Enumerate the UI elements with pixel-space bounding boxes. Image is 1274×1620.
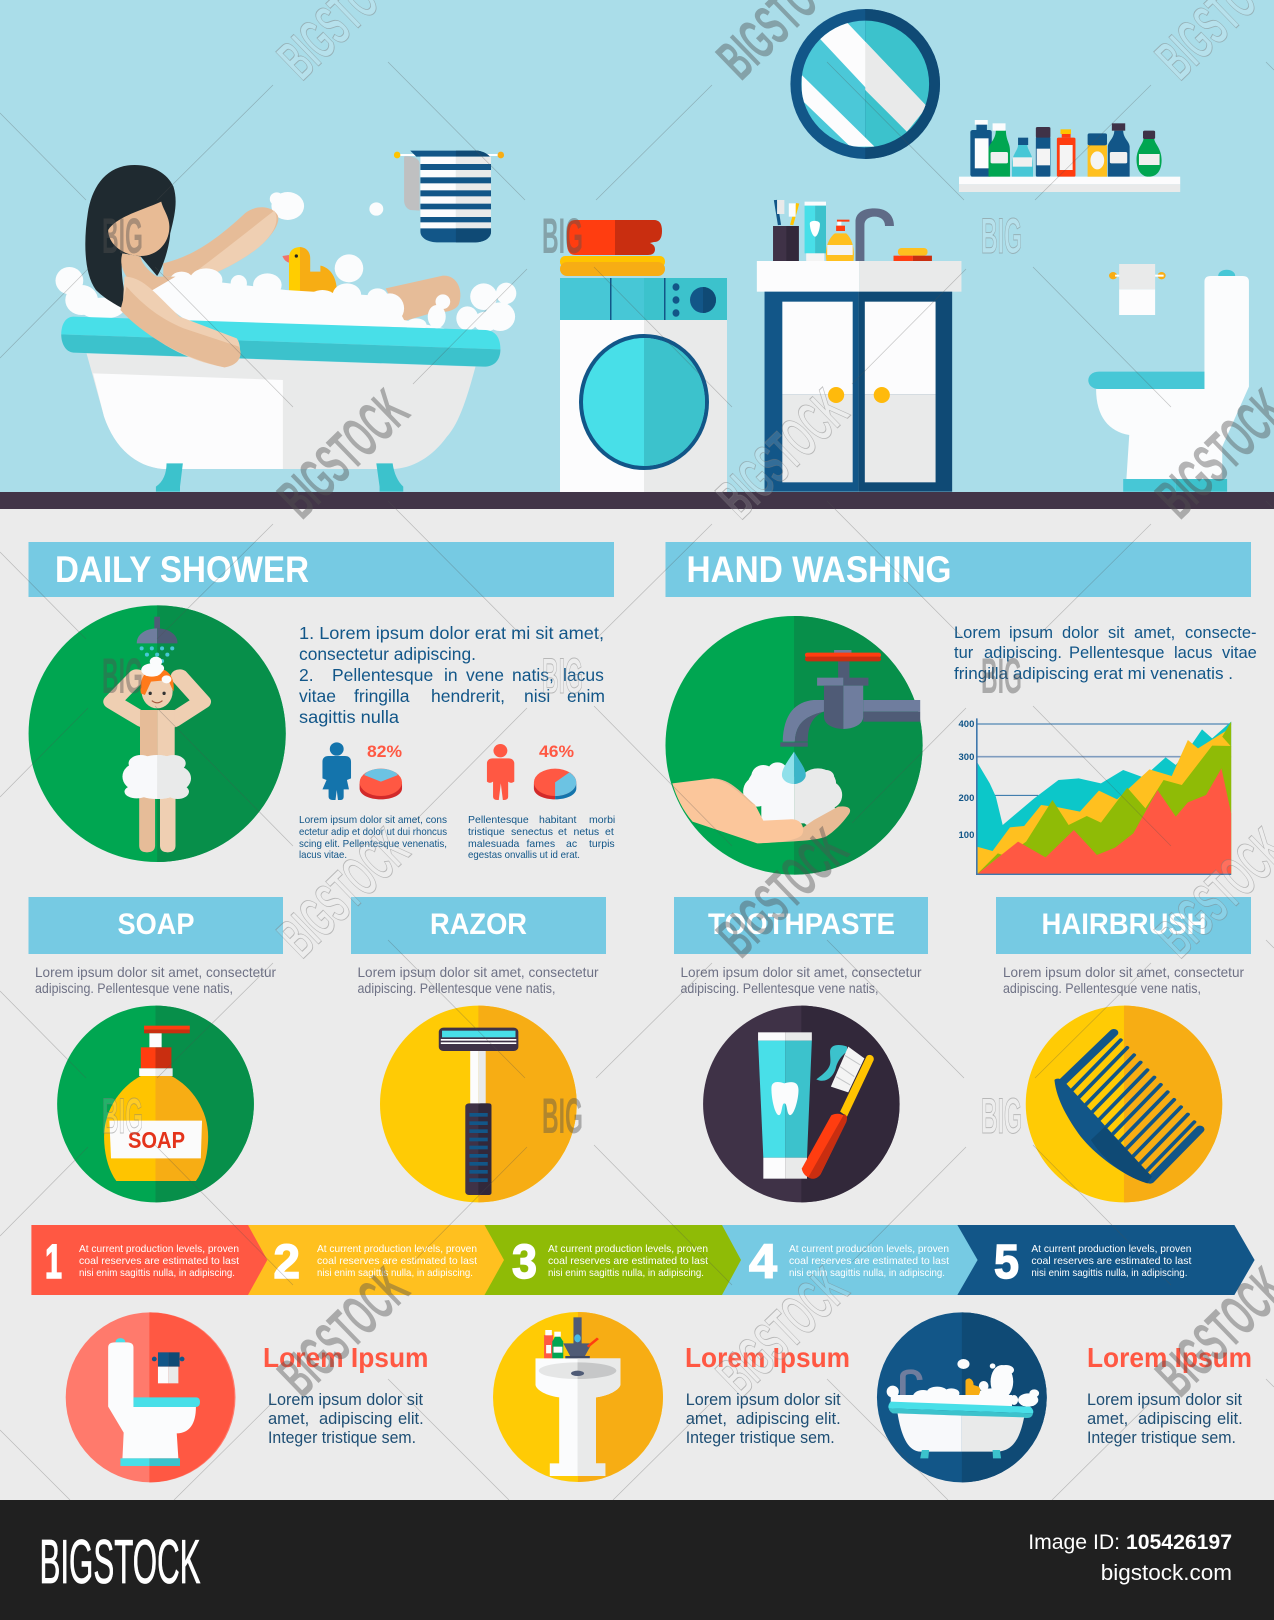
text block: hand washing copy: fringilla adipiscing erat mi venenatis . [954,665,1233,683]
watermark overlay: BIG [981,648,1022,704]
icon: soap dispenser: SOAP [128,1127,185,1153]
heading: hand washing: HAND WASHING [686,549,952,590]
icon: striped towel on rail [394,151,504,242]
text block: sink copy: elit. [815,1410,841,1428]
text block: numbered list: enim [567,686,605,706]
text block: small caption right: fames [526,838,555,850]
step 2: coal reserves are estimated to last [317,1255,477,1267]
step 2: nisi enim sagittis nulla, in adipiscing. [317,1267,473,1279]
step 2: At current production levels, proven [317,1243,477,1255]
page background [0,509,1274,1500]
text block: sink copy: adipiscing [736,1410,809,1428]
chart: layered area chart: 200 [958,793,974,804]
text block: small caption right [468,814,615,861]
text block: numbered list: 1. Lorem ipsum dolor erat mi sit amet, [299,623,604,643]
watermark overlay: BIG [981,208,1022,264]
text block: numbered list: vene [466,665,504,685]
illustration: shelf with bottles [959,120,1180,192]
text block: small caption right: morbi [589,814,615,826]
text block: soap description [35,964,276,996]
text block: numbered list: natis, [512,665,554,685]
illustration: sink cabinet with toiletries [757,200,961,492]
text block: toothpaste description [680,964,922,996]
image id: Image ID: 105426197 [1028,1531,1232,1554]
text block: hand washing copy: amet, [1134,624,1175,642]
text block: toothpaste description: adipiscing. Pellentesque vene natis, [680,980,878,996]
text block: sink copy: Integer tristique sem. [686,1429,835,1447]
text block: razor description: Lorem ipsum dolor sit amet, consectetur [358,964,599,980]
text block: sink copy: amet, [686,1410,727,1428]
text block: numbered list: 2. [299,665,314,685]
panel: five-step arrow ribbon [31,1225,1255,1295]
icon: hand under tap [665,616,923,875]
watermark overlay: BIGSTOCK [705,816,860,969]
text block: hand washing copy: sit [1108,624,1125,642]
text block: small caption left: lacus vitae. [299,849,347,861]
step 3: At current production levels, proven [548,1243,708,1255]
step 4: coal reserves are estimated to last [789,1255,949,1267]
text block: hand washing copy: adipiscing. [984,644,1062,662]
illustration: toilet and paper roll [1088,264,1249,492]
text block: small caption right: turpis [589,838,615,850]
wall background [0,0,1274,492]
text block: numbered list: Pellentesque [332,665,433,685]
text block: razor description [358,964,599,996]
text block: small caption left: Lorem ipsum dolor sit amet, cons [299,814,447,826]
text block: hand washing copy [954,624,1257,683]
watermark overlay: BIG [102,648,143,704]
step 4 [722,1225,978,1295]
step 3: coal reserves are estimated to last [548,1255,708,1267]
text block: small caption right: tristique [468,826,505,838]
text block: numbered list: in [444,665,458,685]
step 5: nisi enim sagittis nulla, in adipiscing. [1031,1267,1187,1279]
text block: bath copy: Integer tristique sem. [1087,1429,1236,1447]
panel: hand washing [665,542,1257,875]
step 1: coal reserves are estimated to last [79,1255,239,1267]
step 2: 2 [274,1236,300,1289]
text block: small caption right: et [558,826,567,838]
panel: hairbrush [996,897,1251,1202]
text block: hairbrush description: Lorem ipsum dolor sit amet, consectetur [1003,964,1244,980]
step 4: nisi enim sagittis nulla, in adipiscing. [789,1267,945,1279]
icon: person showering [29,605,286,862]
heading: toothpaste [674,897,928,954]
stat: female 82% [322,742,402,800]
icon: toilet circle [66,1312,236,1482]
text block: small caption right: netus [574,826,599,838]
text block: bath copy: amet, [1087,1410,1128,1428]
step 5: coal reserves are estimated to last [1031,1255,1191,1267]
watermark overlay: BIG [981,1088,1022,1144]
watermark overlay: BIGSTOCK [705,1255,860,1408]
step 1: nisi enim sagittis nulla, in adipiscing. [79,1267,235,1279]
text block: bath copy: elit. [1217,1410,1243,1428]
illustration: round wall mirror [790,9,940,159]
text block: small caption right: et [605,826,614,838]
text block: small caption right: senectus [511,826,553,838]
watermark overlay: BIG [542,1088,583,1144]
watermark overlay: BIG [542,208,583,264]
icon: bathtub circle [877,1312,1047,1482]
step 1: At current production levels, proven [79,1243,239,1255]
chart: layered area chart: 400 [958,719,974,730]
chart: layered area chart: 100 [958,830,974,841]
stat: female 82%: 82% [367,742,402,761]
text block: sink copy: Lorem ipsum dolor sit [686,1391,841,1409]
text block: toilet copy: Lorem Ipsum [263,1342,428,1373]
heading: soap [28,897,283,954]
text block: bath copy [1087,1342,1252,1447]
text block: toilet copy: Lorem ipsum dolor sit [268,1391,423,1409]
watermark overlay: BIGSTOCK [266,1255,421,1408]
text block: numbered list: consectetur adipiscing. [299,644,476,664]
text block: numbered list: nisi [524,686,550,706]
watermark overlay: BIG [542,648,583,704]
text block: toilet copy [263,1342,428,1447]
watermark overlay: BIG [102,208,143,264]
step 3: 3 [512,1236,537,1289]
site url: bigstock.com [1101,1560,1232,1585]
text block: hand washing copy: vitae [1222,644,1257,662]
watermark overlay: BIG [102,1088,143,1144]
text block: hand washing copy: consecte- [1185,624,1257,642]
text block: toothpaste description: Lorem ipsum dolor sit amet, consectetur [680,964,922,980]
text block: small caption right: malesuada [468,838,520,850]
text block: toilet copy: Integer tristique sem. [268,1429,416,1447]
step 4: 4 [749,1236,777,1289]
text block: small caption right: habitant [539,814,576,826]
text block: hand washing copy: Lorem [954,624,1001,642]
icon: comb [1026,1006,1222,1202]
text block: sink copy [685,1342,850,1447]
text block: numbered list: hendrerit, [431,686,505,706]
heading: hairbrush [996,897,1251,954]
step 1: 1 [45,1236,62,1289]
footer bar [0,1500,1274,1620]
text block: soap description: Lorem ipsum dolor sit amet, consectetur [35,964,276,980]
step 5: 5 [994,1236,1019,1289]
text block: razor description: adipiscing. Pellentesque vene natis, [358,980,556,996]
heading: razor: RAZOR [430,908,527,941]
heading: hand washing [666,542,1251,597]
watermark overlay: BIGSTOCK [705,377,860,530]
chart: layered area chart [958,718,1231,874]
floor strip [0,492,1274,509]
text block: numbered list [299,623,605,727]
heading: soap: SOAP [118,908,194,941]
text block: bath copy: adipiscing [1138,1410,1211,1428]
text block: numbered list: lacus [563,665,604,685]
step 2 [248,1225,504,1295]
step 5 [957,1225,1255,1295]
illustration: woman bathing in tub [56,165,516,492]
text block: small caption left: ectetur adip et dolor ut dui rhoncus [299,826,447,838]
text block: hand washing copy: ipsum [1009,624,1053,642]
panel: toothpaste [674,897,928,1202]
text block: bath copy: Lorem Ipsum [1087,1342,1252,1373]
stat: male 46%: 46% [539,742,574,761]
chart: layered area chart: 300 [958,752,974,763]
icon: razor [380,1006,577,1202]
text block: bath copy: Lorem ipsum dolor sit [1087,1391,1242,1409]
text block: toilet copy: elit. [398,1410,424,1428]
text block: numbered list: vitae [299,686,336,706]
heading: daily shower: DAILY SHOWER [55,549,309,590]
heading: toothpaste: TOOTHPASTE [708,908,895,941]
icon: pedestal sink circle [493,1312,663,1482]
heading: daily shower [28,542,614,597]
text block: numbered list: sagittis nulla [299,707,399,727]
text block: numbered list: fringilla [354,686,410,706]
heading: razor [351,897,606,954]
text block: toilet copy: amet, [268,1410,309,1428]
text block: hand washing copy: dolor [1062,624,1099,642]
text block: small caption left [299,814,447,861]
step 3 [484,1225,741,1295]
text block: hairbrush description: adipiscing. Pellentesque vene natis, [1003,980,1201,996]
panel: daily shower [28,542,615,862]
heading: hairbrush: HAIRBRUSH [1042,908,1206,941]
text block: hairbrush description [1003,964,1244,996]
panel: soap [28,897,283,1202]
watermark overlay: BIGSTOCK [266,816,421,969]
stat: male 46% [487,742,576,800]
panel: razor [351,897,606,1202]
text block: hand washing copy: lacus [1174,644,1213,662]
text block: small caption right: egestas onvallis ut id erat. [468,849,580,861]
icon: soap dispenser [57,1006,254,1202]
text block: hand washing copy: tur [954,644,974,662]
step 5: At current production levels, proven [1031,1243,1192,1255]
text block: sink copy: Lorem Ipsum [685,1342,850,1373]
logo: bigstock: BIGSTOCK [40,1528,200,1597]
text block: small caption right: ac [566,838,577,850]
watermark overlay: BIGSTOCK [266,377,421,530]
illustration: washing machine with folded towels [560,220,727,492]
step 3: nisi enim sagittis nulla, in adipiscing. [548,1267,704,1279]
step 4: At current production levels, proven [789,1243,949,1255]
text block: small caption right: Pellentesque [468,814,529,826]
text block: toilet copy: adipiscing [319,1410,392,1428]
text block: small caption left: scing elit. Pellentesque venenatis, [299,838,447,850]
step 1 [31,1225,267,1295]
icon: toothpaste and toothbrush [703,1006,900,1202]
text block: hand washing copy: Pellentesque [1069,644,1164,662]
text block: soap description: adipiscing. Pellentesque vene natis, [35,980,233,996]
